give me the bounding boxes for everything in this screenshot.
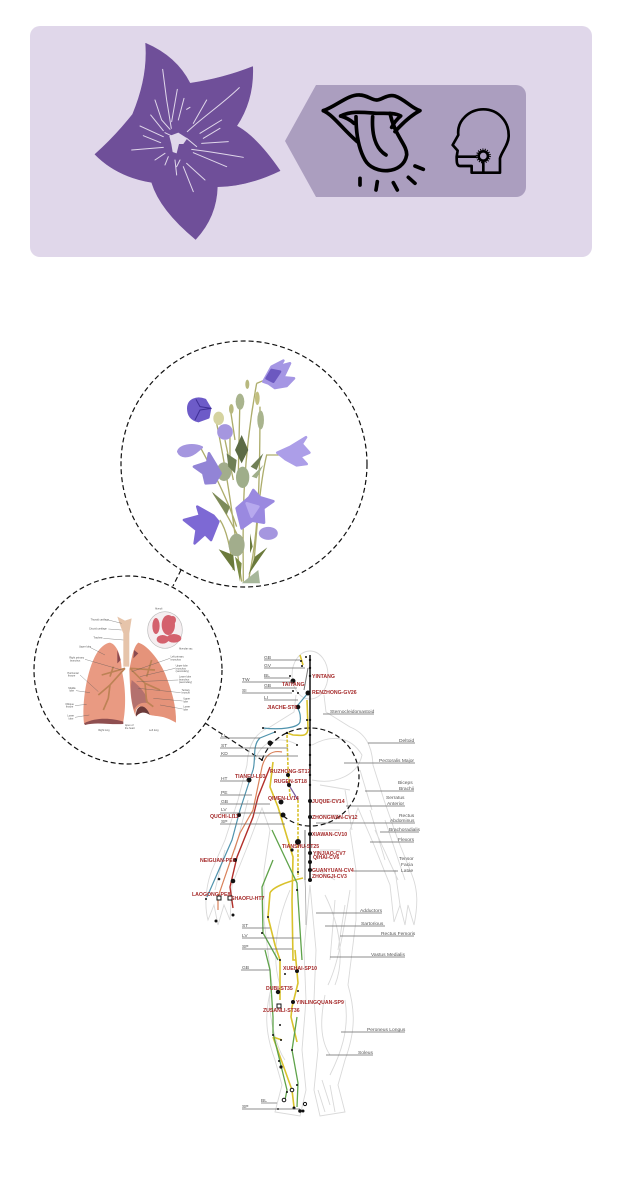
muscle labels right: Rectus Femoris — [381, 931, 416, 937]
lung labels: lobe — [69, 717, 74, 720]
callout: plant circle — [121, 341, 367, 587]
lung labels: bronchus — [179, 678, 190, 681]
callout: lungs circle — [34, 576, 222, 764]
muscle labels right: Soleus — [358, 1050, 374, 1056]
acupoint names: JUQUE-CV14 — [312, 799, 345, 805]
meridian labels left: KD — [221, 751, 228, 757]
lung labels: Apex of — [125, 724, 134, 727]
muscle labels right: Facia — [401, 862, 413, 868]
panel: top banner — [30, 26, 592, 257]
muscle labels right: Pectoralis Major — [379, 758, 414, 764]
lung labels: Lower — [183, 706, 190, 709]
lung labels: Trachea — [93, 636, 103, 639]
acupoint names: RENZHONG-GV26 — [312, 690, 357, 696]
lung labels: lobe — [183, 708, 189, 711]
figure: body outline — [206, 651, 417, 1116]
meridian labels left: BL — [264, 673, 270, 679]
lung labels: Alveolar sac — [179, 647, 193, 650]
meridian labels left: BL — [261, 1098, 267, 1104]
icon: head with throat — [453, 109, 509, 173]
muscle labels right: Sartorious — [361, 921, 384, 927]
lung labels: Oblique — [65, 703, 75, 706]
acupoint names: QUCHI-LI11 — [210, 814, 239, 820]
muscle labels right: Deltoid — [399, 738, 415, 744]
lung labels: Left lung — [149, 729, 159, 732]
connector: plant to lungs — [173, 570, 181, 586]
lung labels: Lower lobe — [179, 676, 192, 679]
lung labels: Upper lobe — [79, 646, 92, 649]
acupoint names: LAOGONG-PE8 — [192, 892, 230, 898]
meridian labels left: ST — [221, 743, 227, 749]
meridian labels left: SI — [242, 688, 247, 694]
acupoint names: ZUSANLI-ST36 — [263, 1008, 300, 1014]
muscle labels right: Rectus — [399, 813, 415, 819]
meridian labels left: LV — [242, 933, 248, 939]
lung labels: (secondary) — [176, 670, 189, 673]
acupoint names: XIAWAN-CV10 — [312, 832, 347, 838]
acupoint names: QIHAI-CV6 — [313, 855, 339, 861]
lung labels: (secondary) — [179, 681, 192, 684]
meridian labels left — [220, 655, 305, 1110]
acupoint names: JIACHE-ST6 — [267, 705, 297, 711]
trachea — [117, 617, 132, 667]
tag: sensory icons background — [285, 85, 526, 197]
acupoint names: SHAOFU-HT7 — [231, 896, 265, 902]
lung labels: Horizontal — [67, 672, 79, 675]
acupoint names: YINJIAO-CV7 — [313, 851, 346, 857]
meridian labels left: TW — [242, 677, 250, 683]
meridian labels left: LI — [221, 733, 225, 739]
lung labels: Cricoid cartilage — [89, 628, 107, 631]
muscle labels right: Brachii — [399, 786, 414, 792]
lung labels: Left primary — [171, 656, 185, 659]
acupoint names: DUBI-ST35 — [266, 986, 293, 992]
muscle labels right: Anterior — [387, 801, 404, 807]
lung labels: Thyroid cartilage — [91, 619, 110, 622]
acupoint names: ZHONGWAN-CV12 — [312, 815, 358, 821]
lung labels: bronchus — [176, 667, 187, 670]
acupoint names: GUANYUAN-CV4 — [312, 868, 354, 874]
meridian labels left: GB — [242, 965, 249, 971]
muscle labels right: Biceps — [398, 780, 413, 786]
lung labels — [65, 607, 193, 732]
acupoint names: YINTANG — [312, 674, 335, 680]
meridian labels left: GB — [264, 655, 271, 661]
meridian labels left: LV — [221, 807, 227, 813]
lung labels: the heart — [125, 727, 135, 730]
acupoint names: RUZHONG-ST17 — [270, 769, 310, 775]
muscle labels right: Brachoradialis — [389, 827, 421, 833]
meridian labels left: HT — [221, 776, 228, 782]
muscle labels right: Peroneus Longus — [367, 1027, 406, 1033]
meridian lines — [207, 655, 310, 1107]
muscle labels right: Tensor — [399, 856, 414, 862]
alveoli inset — [148, 612, 182, 648]
lung labels: lobe — [69, 690, 75, 693]
meridian labels left: GB — [264, 683, 271, 689]
meridian labels left: GB — [221, 799, 228, 805]
lung labels: Alveoli — [155, 607, 163, 610]
acupoint names: TIANFU-LU3 — [235, 774, 266, 780]
meridian labels left: GV — [264, 663, 272, 669]
lung labels: bronchus — [171, 658, 182, 661]
acupoint names: RUGEN-ST18 — [274, 779, 307, 785]
acupoint names: TIANSHU-ST25 — [282, 844, 319, 850]
muscle labels right: Flexors — [398, 837, 415, 843]
lung labels: fissure — [66, 706, 74, 709]
icon: balloon flower — [95, 43, 280, 239]
lung labels: lobe — [183, 700, 189, 703]
lung labels: Upper — [183, 698, 190, 701]
lung labels: Middle — [68, 687, 76, 690]
meridian labels left: ST — [242, 923, 248, 929]
meridian labels left: PE — [221, 790, 228, 796]
acupoint markers — [205, 656, 312, 1113]
meridian labels left: SP — [242, 944, 249, 950]
acupoint names: ZHONGJI-CV3 — [312, 874, 347, 880]
muscle labels right: Latae — [401, 868, 414, 874]
lung labels: fissure — [68, 675, 76, 678]
lung labels: Right lung — [98, 729, 110, 732]
meridian labels left: SP — [221, 819, 228, 825]
muscle labels right: Abdominus — [390, 818, 415, 824]
lung labels: bronchi — [182, 692, 190, 695]
connector: lungs to torso — [205, 723, 262, 760]
acupoint names: TAIYANG — [282, 682, 304, 688]
muscle labels right: Vastus Medialis — [371, 952, 405, 958]
icon: tongue and mouth — [323, 95, 423, 190]
lung labels: Upper lobe — [176, 665, 188, 668]
acupoint names: XUEHAI-SP10 — [283, 966, 317, 972]
acupoint names: NEIGUAN-PE6 — [200, 858, 236, 864]
muscle labels right: Adductors — [360, 908, 383, 914]
lung labels: Lower — [67, 715, 74, 718]
lung labels: Right primary — [69, 657, 85, 660]
lung labels: bronchus — [70, 659, 81, 662]
muscle labels right: Sternocleidomastoid — [330, 709, 375, 715]
acupoint names: QIMEN-LV14 — [268, 796, 299, 802]
dashed circle: torso focus — [262, 728, 359, 826]
muscle labels right — [316, 709, 421, 1056]
meridian labels left: SP — [242, 1104, 249, 1110]
left lung — [129, 643, 176, 723]
illustration: lungs anatomy — [65, 607, 193, 732]
top flower — [263, 361, 294, 388]
illustration: balloon flower plant — [178, 361, 309, 583]
acupoint names: YINLINGQUAN-SP9 — [296, 1000, 344, 1006]
acupoint names — [192, 674, 358, 1014]
muscle labels right: Serratus — [386, 795, 405, 801]
right lung — [83, 643, 125, 723]
meridian labels left: LI — [264, 695, 268, 701]
lung labels: Tertiary — [182, 689, 191, 692]
